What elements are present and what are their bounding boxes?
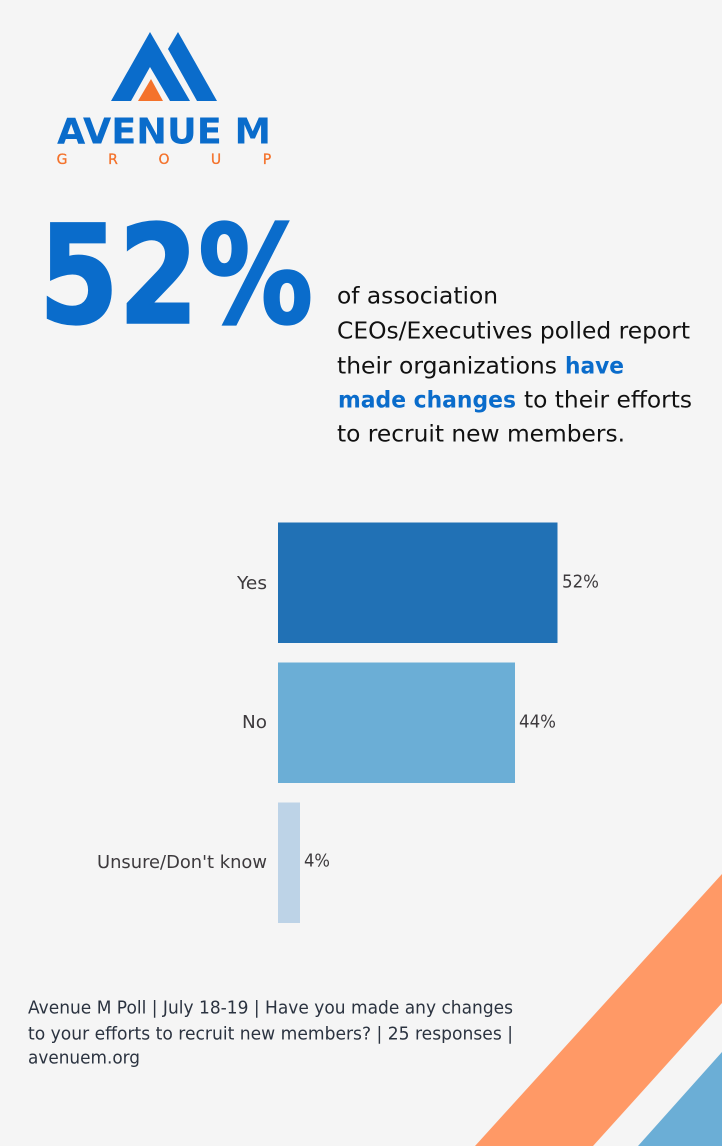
bar: Unsure/Don't know 4% [97,802,330,923]
logo subtitle [57,152,271,168]
bar: No 44%: No [242,713,267,733]
logo subtitle: U [211,152,221,168]
description text: to their efforts [524,386,692,414]
bar: Yes 52%: 52% [562,572,599,592]
bar: Yes 52% [236,522,599,643]
description text: made changes [338,386,516,414]
footer source note: Avenue M Poll | July 18-19 | Have you made any changes [28,998,513,1018]
logo subtitle: O [158,152,170,168]
logo: Avenue M Group [57,32,271,168]
footer source note: to your efforts to recruit new members? | 25 responses | [28,1024,513,1044]
logo subtitle: P [263,152,271,168]
description text: have [565,352,624,380]
bar: Unsure/Don't know 4%: Unsure/Don't know [97,853,267,873]
logo wordmark: AVENUE M [57,112,271,152]
description text [337,282,692,448]
decorative diagonal stripes [475,874,722,1146]
logo subtitle: R [108,152,118,168]
description text: of association [337,282,498,310]
logo subtitle: G [57,152,67,168]
description text: their organizations [337,352,557,380]
footer source note: avenuem.org [28,1048,140,1068]
bar: No 44% [242,662,556,783]
bar: No 44%: 44% [519,712,556,732]
footer source note [28,998,513,1068]
bar chart [97,522,599,923]
big statistic: 52% [39,198,313,356]
bar: Unsure/Don't know 4%: 4% [304,852,330,872]
description text: CEOs/Executives polled report [337,316,690,344]
description text: to recruit new members. [337,420,625,448]
icon: mountain mark [111,32,217,101]
bar: Yes 52%: Yes [236,574,267,594]
